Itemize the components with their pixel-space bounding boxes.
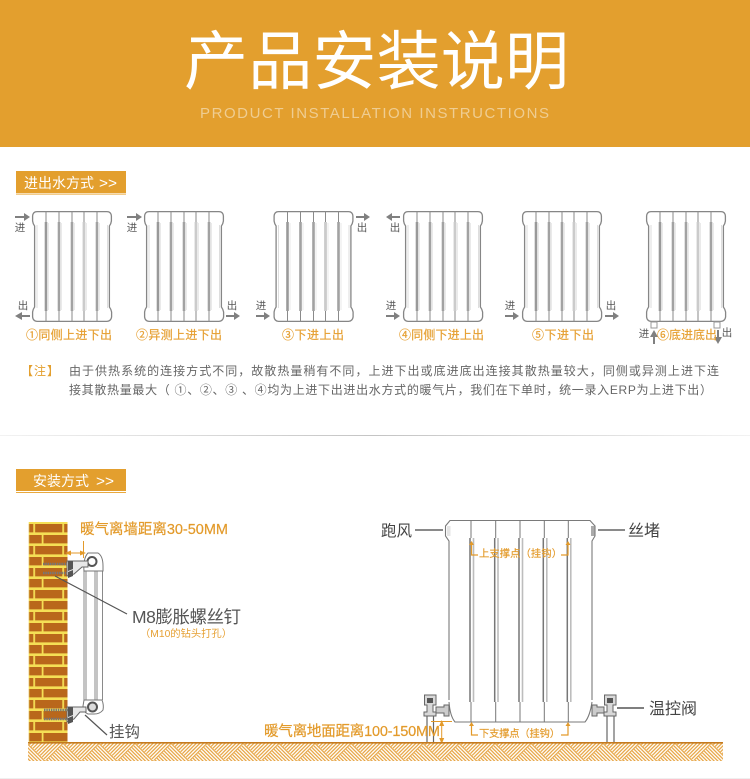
panel: side view wall mounting: [29, 521, 241, 742]
panel: method 6: 进: [639, 328, 650, 340]
callout: plug: [598, 522, 660, 540]
right valve: [592, 695, 616, 742]
panel: method 1: 进: [15, 222, 26, 234]
section heading: installation method: >>: [96, 473, 114, 490]
section heading: water inlet and outlet methods: [16, 171, 126, 195]
panel: method 4: 进: [386, 300, 397, 312]
callout: hook: [85, 715, 140, 741]
callout: M8 expansion screw: M8膨胀螺丝钉: [132, 607, 241, 627]
bottom bracket and screws: [44, 707, 86, 724]
wall distance dimension: 暖气离墙距离30-50MM: [80, 521, 228, 538]
callout: thermostatic valve: [617, 700, 697, 718]
callout: plug: 丝堵: [628, 522, 660, 540]
upper support points: [469, 541, 570, 560]
ground with hatching: [28, 742, 723, 761]
panel: method 1: [15, 211, 112, 342]
note text block: 【注】: [21, 363, 59, 378]
panel: method 3: ③下进上出: [282, 328, 344, 342]
panel: front view radiator: [264, 520, 697, 742]
section heading: water inlet and outlet methods: >>: [99, 175, 117, 192]
callout: M8 expansion screw: （M10的钻头打孔）: [140, 627, 232, 640]
floor distance dimension: 暖气离地面距离100-150MM: [264, 723, 440, 740]
subtitle: PRODUCT INSTALLATION INSTRUCTIONS: [200, 105, 549, 122]
panel: method 4: ④同侧下进上出: [399, 328, 484, 342]
callout: air vent: 跑风: [381, 522, 412, 540]
panel: method 5: 出: [606, 299, 616, 312]
note text block: 接其散热量最大（ ①、②、③ 、④均为上进下出进出水方式的暖气片，我们在下单时，统一录入ERP为上进下出）: [69, 382, 712, 397]
section heading: installation method: 安装方式: [33, 473, 89, 489]
panel: method 6: 出: [722, 326, 732, 339]
header banner: [0, 0, 750, 147]
left valve: [424, 695, 449, 742]
title: 产品安装说明: [184, 26, 569, 98]
panel: method 4: [386, 211, 484, 342]
panel: method 6: [639, 211, 732, 344]
section heading: water inlet and outlet methods: 进出水方式: [24, 175, 94, 191]
brick wall: [29, 522, 68, 742]
callout: M8 expansion screw: [55, 576, 241, 640]
panel: method 1: ①同侧上进下出: [26, 328, 112, 342]
panel: method 4: 出: [390, 221, 400, 234]
panel: method 3: 出: [357, 221, 367, 234]
callout: air vent: [381, 522, 443, 540]
panel: method 6: ⑥底进底出: [657, 327, 717, 342]
callout: thermostatic valve: 温控阀: [649, 700, 697, 718]
radiator body: [445, 520, 595, 722]
panel: method 1: 出: [18, 299, 28, 312]
side radiator: [83, 553, 103, 714]
panel: method 2: 出: [227, 299, 237, 312]
panel: method 5: [505, 211, 619, 342]
note text block: [21, 363, 719, 397]
panel: method 3: 进: [256, 300, 267, 312]
lower support points: 下支撑点（挂钩）: [479, 727, 560, 740]
callout: hook: 挂钩: [109, 723, 140, 741]
panel: method 5: ⑤下进下出: [532, 328, 594, 342]
panel: method 2: [127, 211, 240, 342]
top bracket and screws: [43, 561, 88, 578]
lower support points: [469, 722, 570, 740]
panel: method 3: [256, 211, 370, 342]
note text block: 由于供热系统的连接方式不同，故散热量稍有不同，上进下出或底进底出连接其散热量较大，同侧或异测上进下连: [69, 363, 719, 378]
panel: method 5: 进: [505, 300, 516, 312]
panel: method 2: ②异测上进下出: [136, 328, 222, 342]
panel: method 2: 进: [127, 222, 138, 234]
section heading: installation method: [16, 469, 126, 493]
upper support points: 上支撑点（挂钩）: [479, 547, 562, 560]
